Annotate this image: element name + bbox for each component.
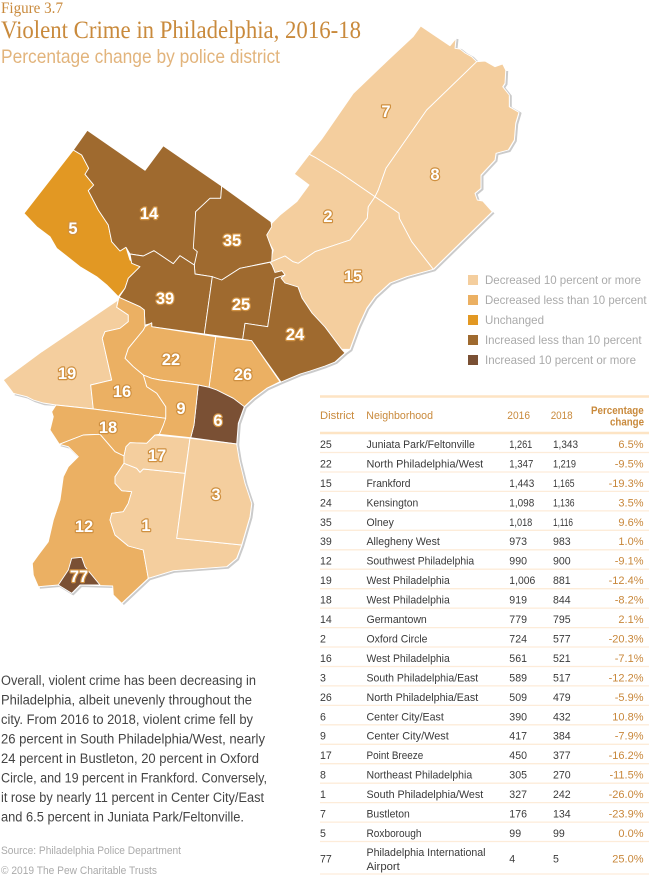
row: district 25: 1,343 <box>553 439 578 451</box>
district 16 <box>91 297 166 418</box>
row: district 17: 17 <box>320 750 332 762</box>
row: district 3: 517 <box>553 672 571 684</box>
row: district 14: 2.1% <box>618 614 644 626</box>
district number labels: 39 <box>156 290 174 308</box>
district 12 <box>32 434 148 603</box>
row: district 8: Northeast Philadelphia <box>366 770 472 782</box>
row: district 22: North Philadelphia/West <box>366 458 483 470</box>
row: district 26 <box>320 692 644 704</box>
row: district 22: -9.5% <box>615 458 644 470</box>
row: district 2: 2 <box>320 634 326 646</box>
district number labels: 25 <box>232 296 250 314</box>
legend: increased 10 percent or more: Increased 10 percent or more <box>485 353 636 367</box>
row: district 35: Olney <box>366 517 394 529</box>
body paragraph: Circle, and 19 percent in Frankford. Conversely, <box>1 770 267 786</box>
row: district 22: 22 <box>320 458 332 470</box>
row: district 77: Airport <box>366 861 400 873</box>
row: district 9: 417 <box>509 731 527 743</box>
row: district 25: Juniata Park/Feltonville <box>366 439 475 451</box>
row: district 2: Oxford Circle <box>366 634 428 646</box>
district number labels: 6 <box>213 412 223 430</box>
district 19 <box>3 300 128 409</box>
row: district 7: 134 <box>553 808 571 820</box>
row: district 77: 4 <box>509 854 515 866</box>
district number labels: 35 <box>223 232 241 250</box>
row: district 8: 270 <box>553 770 571 782</box>
row: district 17: -16.2% <box>609 750 644 762</box>
row: district 14: 779 <box>509 614 527 626</box>
district number labels: 14 <box>140 205 159 223</box>
row: district 15: -19.3% <box>609 478 644 490</box>
row: district 15: 1,443 <box>509 478 534 490</box>
row: district 7: -23.9% <box>609 808 644 820</box>
district 5 <box>24 150 140 297</box>
row: district 14: Germantown <box>366 614 427 626</box>
row: district 19: 881 <box>553 575 571 587</box>
row: district 9: Center City/West <box>366 731 449 743</box>
body paragraph: Overall, violent crime has been decreasing in <box>1 673 256 688</box>
row: district 17: Point Breeze <box>366 750 423 762</box>
body paragraph: Philadelphia, albeit unevenly throughout the <box>1 692 252 708</box>
row: district 24: 1,136 <box>553 497 575 509</box>
district 3 <box>177 438 252 545</box>
district number labels: 7 <box>381 103 391 121</box>
subtitle: Percentage change by police district <box>1 46 281 68</box>
row: district 17 <box>320 750 644 762</box>
row: district 6: 432 <box>553 711 571 723</box>
row: district 12: 12 <box>320 556 332 568</box>
row: district 22 <box>320 458 644 470</box>
row: district 12 <box>320 556 644 568</box>
row: district 19: 1,006 <box>509 575 535 587</box>
row: district 15: Frankford <box>366 478 411 490</box>
row: district 26: 479 <box>553 692 571 704</box>
row: district 22: 1,219 <box>553 458 576 470</box>
row: district 3: -12.2% <box>609 672 644 684</box>
row: district 2: 724 <box>509 634 527 646</box>
district number labels: 15 <box>344 268 362 286</box>
row: district 6: 6 <box>320 711 326 723</box>
row: district 18: 18 <box>320 595 332 607</box>
row: district 19 <box>320 575 644 587</box>
row: district 39: 983 <box>553 536 571 548</box>
district number labels: 26 <box>234 366 252 384</box>
row: district 5: 0.0% <box>618 828 644 840</box>
row: district 7 <box>320 808 644 820</box>
body paragraph: it rose by nearly 11 percent in Center City/East <box>1 790 264 805</box>
row: district 3 <box>320 672 644 684</box>
row: district 35 <box>320 517 644 529</box>
row: district 12: 900 <box>553 556 571 568</box>
district number labels: 24 <box>286 326 305 344</box>
legend: increased less than 10 percent: Increased less than 10 percent <box>485 333 642 347</box>
district number labels: 5 <box>68 220 78 238</box>
row: district 6: 390 <box>509 711 527 723</box>
row: district 3: South Philadelphia/East <box>366 672 478 684</box>
district number labels: 19 <box>58 365 76 383</box>
district 26 <box>209 337 280 407</box>
river edge shadows <box>15 39 521 604</box>
row: district 35: 1,018 <box>509 517 532 529</box>
district 7 <box>309 26 477 197</box>
source note: Source: Philadelphia Police Department <box>1 845 181 857</box>
row: district 24: 3.5% <box>618 497 644 509</box>
district 24 <box>243 275 345 382</box>
district number labels: 9 <box>176 400 186 418</box>
row: district 35: 9.6% <box>618 517 644 529</box>
district number labels: 3 <box>211 486 221 504</box>
row: district 39: Allegheny West <box>366 536 440 548</box>
row: district 5: 99 <box>553 828 565 840</box>
row: district 18: 919 <box>509 595 527 607</box>
row: district 15: 15 <box>320 478 332 490</box>
body paragraph: 26 percent in South Philadelphia/West, nearly <box>1 732 265 746</box>
row: district 8: 305 <box>509 770 527 782</box>
body paragraph: 24 percent in Bustleton, 20 percent in Oxford <box>1 751 259 766</box>
district number labels: 2 <box>323 208 333 226</box>
row: district 19: -12.4% <box>609 575 644 587</box>
row: district 77 <box>320 847 644 873</box>
row: district 39: 39 <box>320 536 332 548</box>
row: district 18 <box>320 595 644 607</box>
row: district 26: 26 <box>320 692 332 704</box>
district 8 <box>375 61 519 269</box>
row: district 26: North Philadelphia/East <box>366 692 478 704</box>
row: district 5 <box>320 828 644 840</box>
row: district 16: 561 <box>509 653 527 665</box>
table header: Neighborhood <box>366 410 433 422</box>
district number labels: 22 <box>162 351 180 369</box>
row: district 12: 990 <box>509 556 527 568</box>
row: district 18: West Philadelphia <box>366 595 450 607</box>
row: district 14 <box>320 614 644 626</box>
table header: 2018 <box>551 410 573 422</box>
row: district 18: 844 <box>553 595 571 607</box>
district number labels: 18 <box>99 419 117 437</box>
row: district 5: Roxborough <box>366 828 422 840</box>
row: district 1: 1 <box>320 789 326 801</box>
row: district 77: 5 <box>553 854 559 866</box>
district 9 <box>143 375 198 438</box>
row: district 77: 77 <box>320 854 332 866</box>
row: district 1: South Philadelphia/West <box>366 789 483 801</box>
row: district 15 <box>320 478 644 490</box>
row: district 15: 1,165 <box>553 478 575 490</box>
district number labels: 17 <box>148 447 166 465</box>
row: district 16: 16 <box>320 653 332 665</box>
row: district 39: 1.0% <box>618 536 644 548</box>
row: district 6: Center City/East <box>366 711 444 723</box>
district 25 <box>204 262 285 339</box>
row: district 35: 1,116 <box>553 517 573 529</box>
district 18 <box>50 405 166 456</box>
row: district 39: 973 <box>509 536 527 548</box>
data table <box>320 396 649 874</box>
row: district 26: -5.9% <box>615 692 644 704</box>
row: district 25: 1,261 <box>509 439 532 451</box>
table header <box>320 405 644 428</box>
district 15 <box>270 197 433 349</box>
row: district 9 <box>320 731 644 743</box>
row: district 26: 509 <box>509 692 527 704</box>
row: district 25: 25 <box>320 439 332 451</box>
row: district 6 <box>320 711 644 723</box>
legend: decreased less than 10 percent: Decreased less than 10 percent <box>485 293 647 307</box>
district number labels: 16 <box>113 383 131 401</box>
row: district 35: 35 <box>320 517 332 529</box>
district 35 <box>193 186 272 280</box>
row: district 9: -7.9% <box>615 731 644 743</box>
row: district 2 <box>320 634 644 646</box>
row: district 9: 384 <box>553 731 571 743</box>
row: district 19: West Philadelphia <box>366 575 450 587</box>
row: district 1: 242 <box>553 789 571 801</box>
row: district 14: 795 <box>553 614 571 626</box>
row: district 25 <box>320 439 644 451</box>
row: district 39 <box>320 536 644 548</box>
title: Violent Crime in Philadelphia, 2016-18 <box>1 17 361 44</box>
row: district 1: 327 <box>509 789 527 801</box>
row: district 8: -11.5% <box>609 770 644 782</box>
row: district 17: 377 <box>553 750 571 762</box>
row: district 17: 450 <box>509 750 527 762</box>
row: district 2: -20.3% <box>609 634 644 646</box>
row: district 77: Philadelphia International <box>366 847 486 859</box>
district number labels: 77 <box>70 568 88 586</box>
row: district 24: Kensington <box>366 497 418 509</box>
row: district 16: -7.1% <box>615 653 644 665</box>
body paragraph: city. From 2016 to 2018, violent crime fell by <box>1 712 253 727</box>
legend <box>468 273 647 367</box>
district 6 <box>191 385 244 444</box>
body paragraph <box>1 673 267 824</box>
row: district 12: -9.1% <box>615 556 644 568</box>
district number labels: 8 <box>430 166 440 184</box>
table header: 2016 <box>507 410 530 422</box>
district 77 <box>58 557 100 593</box>
legend: decreased 10 percent or more: Decreased 10 percent or more <box>485 273 641 287</box>
row: district 14: 14 <box>320 614 332 626</box>
row: district 1: -26.0% <box>609 789 644 801</box>
map: police districts <box>3 26 521 604</box>
district 22 <box>125 323 216 387</box>
row: district 5: 5 <box>320 828 326 840</box>
district 1 <box>110 463 242 578</box>
figure label: Figure 3.7 <box>1 0 63 17</box>
table header: change <box>610 416 644 428</box>
district 39 <box>119 251 212 334</box>
row: district 22: 1,347 <box>509 458 533 470</box>
district number labels: 12 <box>75 518 93 536</box>
row: district 8: 8 <box>320 770 326 782</box>
row: district 2: 577 <box>553 634 571 646</box>
district 17 <box>124 435 190 473</box>
row: district 7: 176 <box>509 808 527 820</box>
row: district 16 <box>320 653 644 665</box>
district number labels: 1 <box>141 517 151 535</box>
district 14 <box>73 130 222 265</box>
row: district 1 <box>320 789 644 801</box>
district 2 <box>266 154 375 263</box>
row: district 7: Bustleton <box>366 808 410 820</box>
row: district 16: 521 <box>553 653 571 665</box>
row: district 3: 589 <box>509 672 527 684</box>
legend: unchanged: Unchanged <box>485 313 544 327</box>
row: district 7: 7 <box>320 808 326 820</box>
row: district 24 <box>320 497 644 509</box>
row: district 12: Southwest Philadelphia <box>366 556 474 568</box>
table header: District <box>320 410 354 422</box>
row: district 8 <box>320 770 644 782</box>
row: district 18: -8.2% <box>615 595 644 607</box>
row: district 24: 24 <box>320 497 332 509</box>
district number labels <box>58 103 440 586</box>
row: district 3: 3 <box>320 672 326 684</box>
body paragraph: and 6.5 percent in Juniata Park/Feltonville. <box>1 810 244 824</box>
row: district 25: 6.5% <box>618 439 644 451</box>
row: district 24: 1,098 <box>509 497 534 509</box>
row: district 77: 25.0% <box>612 854 644 866</box>
row: district 9: 9 <box>320 731 326 743</box>
row: district 16: West Philadelphia <box>366 653 450 665</box>
row: district 19: 19 <box>320 575 332 587</box>
table header: Percentage <box>591 405 644 417</box>
row: district 5: 99 <box>509 828 521 840</box>
row: district 6: 10.8% <box>612 711 644 723</box>
